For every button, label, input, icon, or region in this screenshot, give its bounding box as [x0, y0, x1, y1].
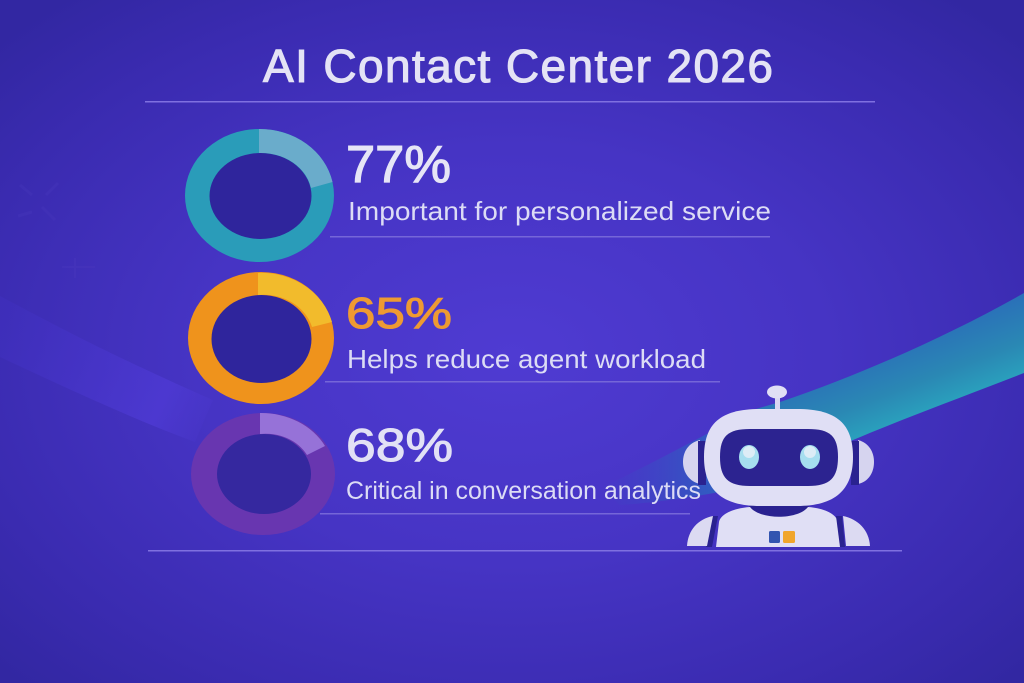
label: agent workload: Helps reduce agent workload	[347, 344, 706, 374]
robot shoulder straps	[706, 516, 845, 547]
donut: orange 65%	[188, 272, 334, 404]
panel: stat 65%	[188, 272, 720, 404]
robot neck	[749, 496, 809, 520]
donut: teal 77%	[185, 129, 334, 262]
robot chest badge	[769, 531, 795, 543]
label: personalized service: Important for personalized service	[348, 196, 771, 226]
robot torso	[716, 507, 841, 547]
panel: stat 77%	[185, 129, 771, 262]
footer divider	[148, 550, 902, 552]
robot head	[704, 409, 853, 506]
robot antenna	[767, 386, 787, 411]
donut: purple 68%	[191, 413, 335, 535]
robot shoulders	[687, 516, 870, 546]
panel: stat 68%	[191, 413, 701, 535]
value: 68%: 68%	[346, 419, 453, 471]
left decorative band	[0, 296, 213, 442]
decorative sparkles	[18, 183, 95, 278]
label: conversation analytics: Critical in conversation analytics	[346, 477, 701, 505]
robot eyes	[739, 445, 820, 469]
value: 65%: 65%	[346, 289, 452, 338]
robot ears	[683, 440, 874, 485]
right teal band	[600, 293, 1024, 505]
header divider	[145, 101, 875, 102]
title: AI Contact Center 2026	[263, 40, 773, 92]
robot face screen	[720, 429, 838, 486]
icon: robot	[683, 386, 874, 547]
value: 77%: 77%	[346, 136, 451, 194]
